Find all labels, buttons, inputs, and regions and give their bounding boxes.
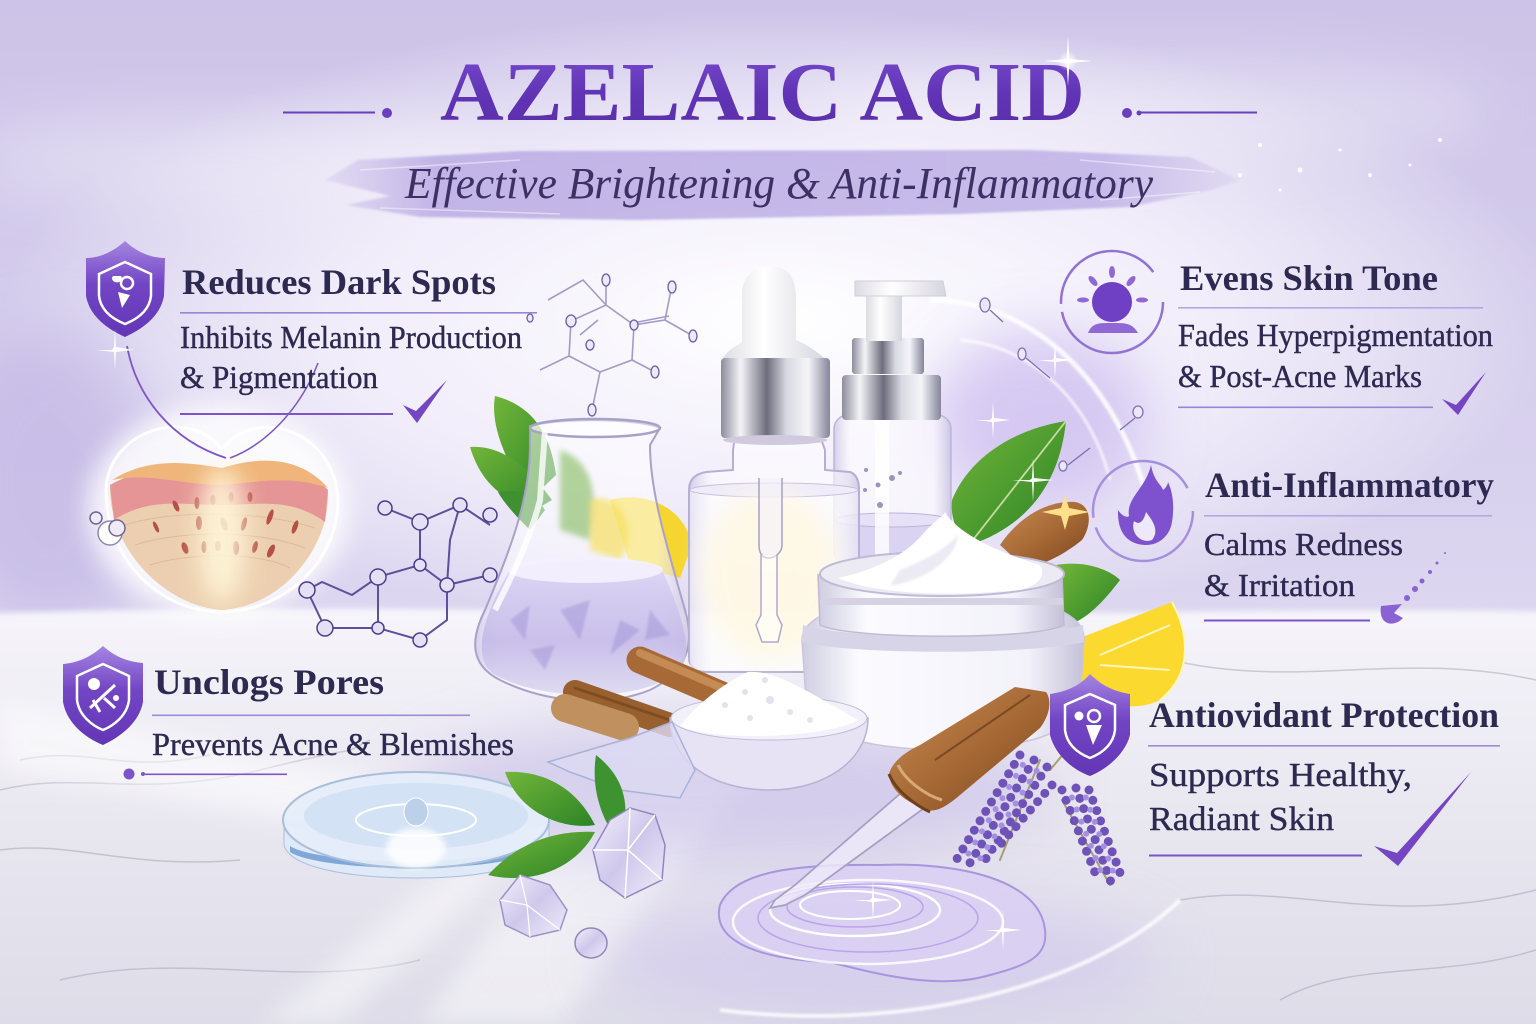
panel: unclogs pores: Prevents Acne & Blemishes (152, 726, 514, 762)
icon: shield (1050, 674, 1130, 776)
subtitle brush banner: Effective Brightening & Anti-Inflammatory (404, 159, 1153, 208)
icon: check mark (403, 380, 447, 423)
callout arc (127, 346, 318, 458)
crystals (500, 808, 665, 958)
icon: check mark (1442, 372, 1486, 415)
panel: reduces dark spots (86, 241, 537, 423)
lemon behind flask (610, 497, 692, 578)
panel: evens skin tone (1061, 251, 1493, 415)
panel: reduces dark spots: Reduces Dark Spots (182, 262, 496, 302)
panel: reduces dark spots: Inhibits Melanin Production (180, 319, 522, 355)
sparkles (96, 329, 1072, 950)
small molecule fragments (980, 298, 1143, 471)
panel: antioxidant protection: Antiovidant Protection (1149, 695, 1499, 735)
panel: unclogs pores (63, 646, 514, 780)
glass pipette (770, 687, 1049, 908)
lemon slice right (1075, 602, 1185, 706)
panel: reduces dark spots: & Pigmentation (180, 359, 378, 395)
panel: unclogs pores: Unclogs Pores (154, 662, 384, 702)
sparkle cluster (1044, 36, 1442, 192)
icon: shield (63, 646, 143, 745)
molecule: lower left (299, 498, 497, 647)
petri dish (283, 772, 549, 878)
cream jar (802, 512, 1084, 750)
title decoration: left (283, 108, 392, 118)
panel: anti-inflammatory: Calms Redness (1204, 526, 1403, 562)
icon: sun circle (1061, 251, 1163, 353)
right leaves (952, 421, 1120, 625)
panel: antioxidant protection (1050, 674, 1500, 866)
skin cross-section illustration (86, 405, 350, 615)
panel: evens skin tone: & Post-Acne Marks (1178, 358, 1422, 394)
panel: evens skin tone: Fades Hyperpigmentation (1178, 317, 1493, 353)
panel: antioxidant protection: Radiant Skin (1149, 801, 1334, 838)
icon: shield (86, 241, 165, 337)
subtitle brush banner (325, 150, 1240, 220)
molecule: upper centre (527, 274, 697, 416)
panel: evens skin tone: Evens Skin Tone (1180, 258, 1438, 298)
panel: anti-inflammatory (1093, 461, 1494, 624)
leaves foreground (488, 755, 625, 878)
icon: dotted arrow (1381, 552, 1446, 624)
title decoration: right (1122, 108, 1257, 118)
icon: check mark (1374, 772, 1471, 866)
decorative dot line (124, 768, 287, 780)
powder bowl (670, 672, 868, 790)
panel: antioxidant protection: Supports Healthy, (1149, 757, 1412, 794)
glass flask (475, 419, 689, 701)
liquid puddle (719, 865, 1045, 981)
panel: anti-inflammatory: & Irritation (1204, 567, 1355, 603)
marble floor (0, 609, 1536, 1024)
panel: anti-inflammatory: Anti-Inflammatory (1205, 465, 1494, 505)
cinnamon sticks (565, 653, 722, 727)
lavender sprigs (955, 740, 1122, 885)
title: AZELAIC ACID (440, 46, 1085, 139)
icon: flame circle (1093, 461, 1193, 561)
leaves behind flask (470, 396, 556, 530)
glass shard (548, 722, 695, 798)
root piece (1000, 495, 1090, 566)
pump bottle (834, 281, 951, 570)
dropper serum bottle (689, 266, 859, 672)
